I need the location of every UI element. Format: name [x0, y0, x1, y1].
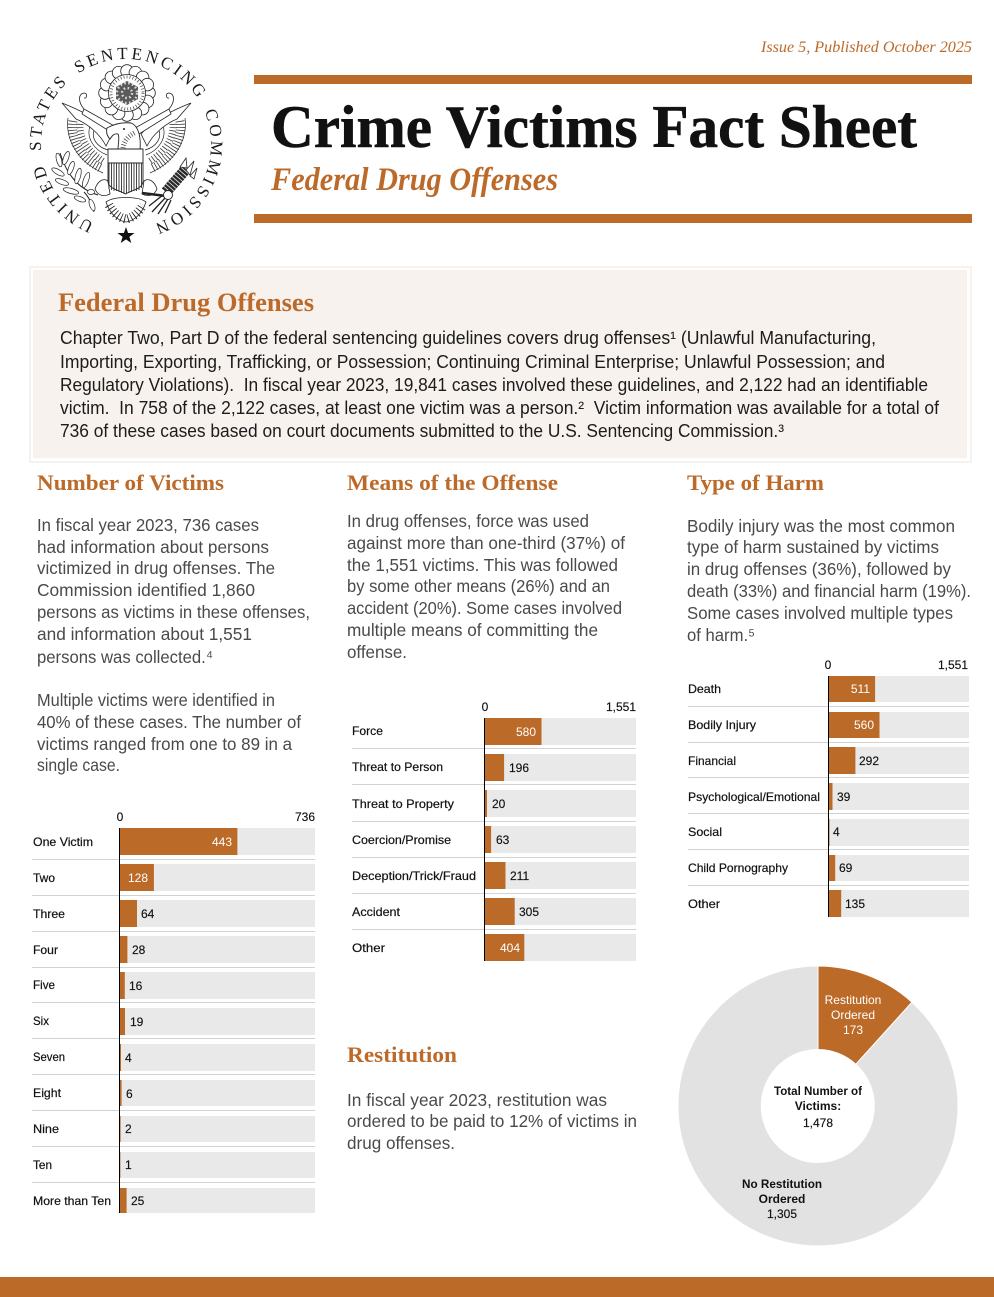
bar chart: type of harm: 560 [854, 718, 874, 732]
bar chart: number of victims: One Victim [33, 835, 93, 849]
bar chart: type of harm: 39 [837, 790, 851, 804]
seal arrows [142, 158, 197, 214]
text block: number of victims: victimized in drug offenses. The [37, 558, 275, 578]
bar chart: number of victims: 28 [132, 943, 146, 957]
bar chart: number of victims [32, 810, 315, 1213]
seal star [118, 227, 134, 243]
bar chart: number of victims: 2 [125, 1122, 132, 1136]
bar chart: number of victims: 4 [125, 1051, 132, 1065]
bar chart: means of the offense: 1,551 [606, 700, 636, 714]
donut label: restitution ordered: Restitution [825, 993, 881, 1007]
bar chart: number of victims: Seven [33, 1050, 65, 1064]
bar chart: number of victims: 1 [125, 1158, 132, 1172]
seal right wing [135, 93, 191, 173]
bar chart: number of victims: 19 [130, 1015, 144, 1029]
bottom header rule [254, 214, 972, 223]
text block: number of victims: persons was collected.⁴ [37, 647, 213, 667]
bar chart: means of the offense: Threat to Property [352, 797, 454, 811]
bar chart: type of harm [688, 658, 969, 917]
donut label: restitution ordered: Ordered [831, 1008, 875, 1022]
top header rule [254, 75, 972, 84]
donut centre label: 1,478 [803, 1116, 833, 1130]
bar chart: number of victims: Four [33, 943, 58, 957]
text block: number of victims: single case. [37, 755, 120, 775]
bar chart: type of harm: Child Pornography [688, 861, 788, 875]
panel body text [60, 328, 940, 441]
bar chart: number of victims: Ten [33, 1158, 52, 1172]
text block: means of the offense: accident (20%). Some cases involved [347, 598, 622, 618]
donut label: restitution ordered: 173 [843, 1023, 863, 1037]
seal: United States Sentencing Commission [30, 48, 222, 243]
bar chart: type of harm: 1,551 [938, 658, 968, 672]
donut label: no restitution ordered: Ordered [759, 1192, 805, 1206]
heading: type of harm: Type of Harm [687, 470, 824, 495]
donut label: no restitution ordered [742, 1177, 822, 1221]
text block: means of the offense: the 1,551 victims. This was followed [347, 555, 618, 575]
bar chart: means of the offense: Coercion/Promise [352, 833, 451, 847]
bar chart: type of harm: 0 [825, 658, 832, 672]
bar chart: number of victims: 25 [131, 1194, 145, 1208]
donut segment: restitution ordered [818, 966, 912, 1064]
donut label: no restitution ordered: 1,305 [767, 1207, 797, 1221]
donut centre label: Victims: [795, 1099, 841, 1113]
text block: means of the offense: In drug offenses, force was used [347, 511, 589, 531]
bar chart: means of the offense: 404 [500, 941, 520, 955]
bar chart: number of victims: 6 [126, 1087, 133, 1101]
seal ring text: UNITED STATES SENTENCING COMMISSION [30, 48, 222, 234]
text block: type of harm: death (33%) and financial harm (19%). [687, 581, 971, 601]
bar chart: means of the offense: 580 [516, 725, 536, 739]
text block: type of harm: Some cases involved multiple types [687, 603, 953, 623]
text block: means of the offense: by some other means (26%) and an [347, 576, 610, 596]
bar chart: number of victims: More than Ten [33, 1194, 111, 1208]
subtitle: Federal Drug Offenses [270, 162, 558, 198]
bar chart: type of harm: 292 [859, 754, 879, 768]
bar chart: number of victims: Three [33, 907, 65, 921]
donut label: restitution ordered [825, 993, 881, 1037]
seal rosette [99, 65, 155, 121]
text block: means of the offense: offense. [347, 642, 407, 662]
text block: restitution: drug offenses. [347, 1133, 455, 1153]
panel body text: Chapter Two, Part D of the federal sentencing guidelines covers drug offenses¹ (Unlawful Manufacturing, [60, 328, 876, 348]
ribbon scroll left [80, 93, 118, 134]
text block: restitution: In fiscal year 2023, restitution was [347, 1090, 607, 1110]
issue line: Issue 5, Published October 2025 [760, 39, 972, 56]
panel body text: 736 of these cases based on court documents submitted to the U.S. Sentencing Commission.³ [60, 421, 784, 441]
bar chart: means of the offense: 211 [510, 869, 529, 883]
bar chart: type of harm: Social [688, 825, 722, 839]
bar chart: means of the offense: 63 [496, 833, 510, 847]
bottom band [0, 1277, 994, 1297]
donut centre label [774, 1084, 863, 1130]
panel body text: Importing, Exporting, Trafficking, or Possession; Continuing Criminal Enterprise; Unlawful Possession; and [60, 352, 885, 372]
text block: type of harm [687, 516, 971, 645]
panel: federal drug offenses intro [30, 267, 971, 462]
seal eagle head [107, 123, 140, 150]
bar chart: type of harm: 4 [833, 825, 840, 839]
heading: restitution: Restitution [347, 1042, 457, 1067]
bar chart: means of the offense [352, 700, 636, 961]
text block: number of victims: had information about persons [37, 537, 269, 557]
bar chart: type of harm: Death [688, 682, 721, 696]
bar chart: number of victims: Six [33, 1014, 49, 1028]
bar chart: number of victims: 128 [128, 871, 148, 885]
text block: means of the offense: against more than one-third (37%) of [347, 533, 625, 553]
text block: means of the offense [347, 511, 625, 662]
title: Crime Victims Fact Sheet [271, 94, 917, 160]
bar chart: type of harm: 511 [851, 682, 870, 696]
donut label: no restitution ordered: No Restitution [742, 1177, 822, 1191]
bar chart: number of victims: 64 [141, 907, 155, 921]
text block: number of victims: 40% of these cases. The number of [37, 712, 301, 732]
bar chart: means of the offense: Accident [352, 905, 401, 919]
seal tail feathers [106, 198, 146, 222]
panel body text: victim. In 758 of the 2,122 cases, at least one victim was a person.² Victim information was available for a total of [60, 398, 940, 418]
bar chart: number of victims: 736 [295, 810, 315, 824]
bar chart: means of the offense: Threat to Person [352, 760, 443, 774]
bar chart: type of harm: Financial [688, 754, 736, 768]
bar chart: type of harm: Bodily Injury [688, 718, 756, 732]
bar chart: number of victims: 16 [129, 979, 143, 993]
text block: number of victims: Commission identified 1,860 [37, 580, 255, 600]
text block: type of harm: type of harm sustained by victims [687, 537, 939, 557]
bar chart: number of victims: 0 [117, 810, 124, 824]
donut chart: restitution [678, 966, 958, 1246]
bar chart: means of the offense: Other [352, 941, 385, 955]
text block: restitution: ordered to be paid to 12% of victims in [347, 1111, 637, 1131]
bar chart: type of harm: Psychological/Emotional [688, 790, 820, 804]
seal olive branch [51, 151, 98, 212]
text block: type of harm: Bodily injury was the most common [687, 516, 955, 536]
bar chart: number of victims: Nine [33, 1122, 59, 1136]
heading: means of the offense: Means of the Offense [347, 470, 558, 495]
text block: number of victims: victims ranged from one to 89 in a [37, 734, 292, 754]
text block: number of victims: In fiscal year 2023, 736 cases [37, 515, 259, 535]
bar chart: type of harm: Other [688, 897, 720, 911]
seal shield [108, 149, 143, 194]
bar chart: number of victims: 443 [212, 835, 232, 849]
donut centre label: Total Number of [774, 1084, 863, 1098]
bar chart: number of victims: Five [33, 978, 55, 992]
donut segment: no restitution ordered [678, 966, 958, 1246]
text block: restitution [347, 1090, 637, 1153]
text block: number of victims: Multiple victims were identified in [37, 690, 275, 710]
text block: number of victims: persons as victims in these offenses, [37, 602, 310, 622]
panel heading: Federal Drug Offenses [58, 288, 314, 317]
bar chart: means of the offense: 196 [509, 761, 529, 775]
seal claws [95, 180, 157, 196]
bar chart: number of victims: Eight [33, 1086, 62, 1100]
seal left wing [62, 93, 118, 173]
bar chart: means of the offense: Deception/Trick/Fraud [352, 869, 476, 883]
bar chart: means of the offense: 305 [519, 905, 539, 919]
bar chart: means of the offense: Force [352, 724, 383, 738]
bar chart: means of the offense: 20 [492, 797, 506, 811]
bar chart: type of harm: 69 [839, 861, 853, 875]
text block: number of victims: and information about 1,551 [37, 624, 252, 644]
heading: number of victims: Number of Victims [37, 470, 224, 495]
panel body text: Regulatory Violations). In fiscal year 2023, 19,841 cases involved these guidelines, and 2,122 had an identifiable [60, 375, 928, 395]
text block: number of victims [37, 515, 310, 775]
text block: means of the offense: multiple means of committing the [347, 620, 598, 640]
bar chart: number of victims: Two [33, 871, 55, 885]
bar chart: type of harm: 135 [845, 897, 865, 911]
bar chart: means of the offense: 0 [482, 700, 489, 714]
text block: type of harm: of harm.⁵ [687, 625, 755, 645]
text block: type of harm: in drug offenses (36%), followed by [687, 559, 951, 579]
